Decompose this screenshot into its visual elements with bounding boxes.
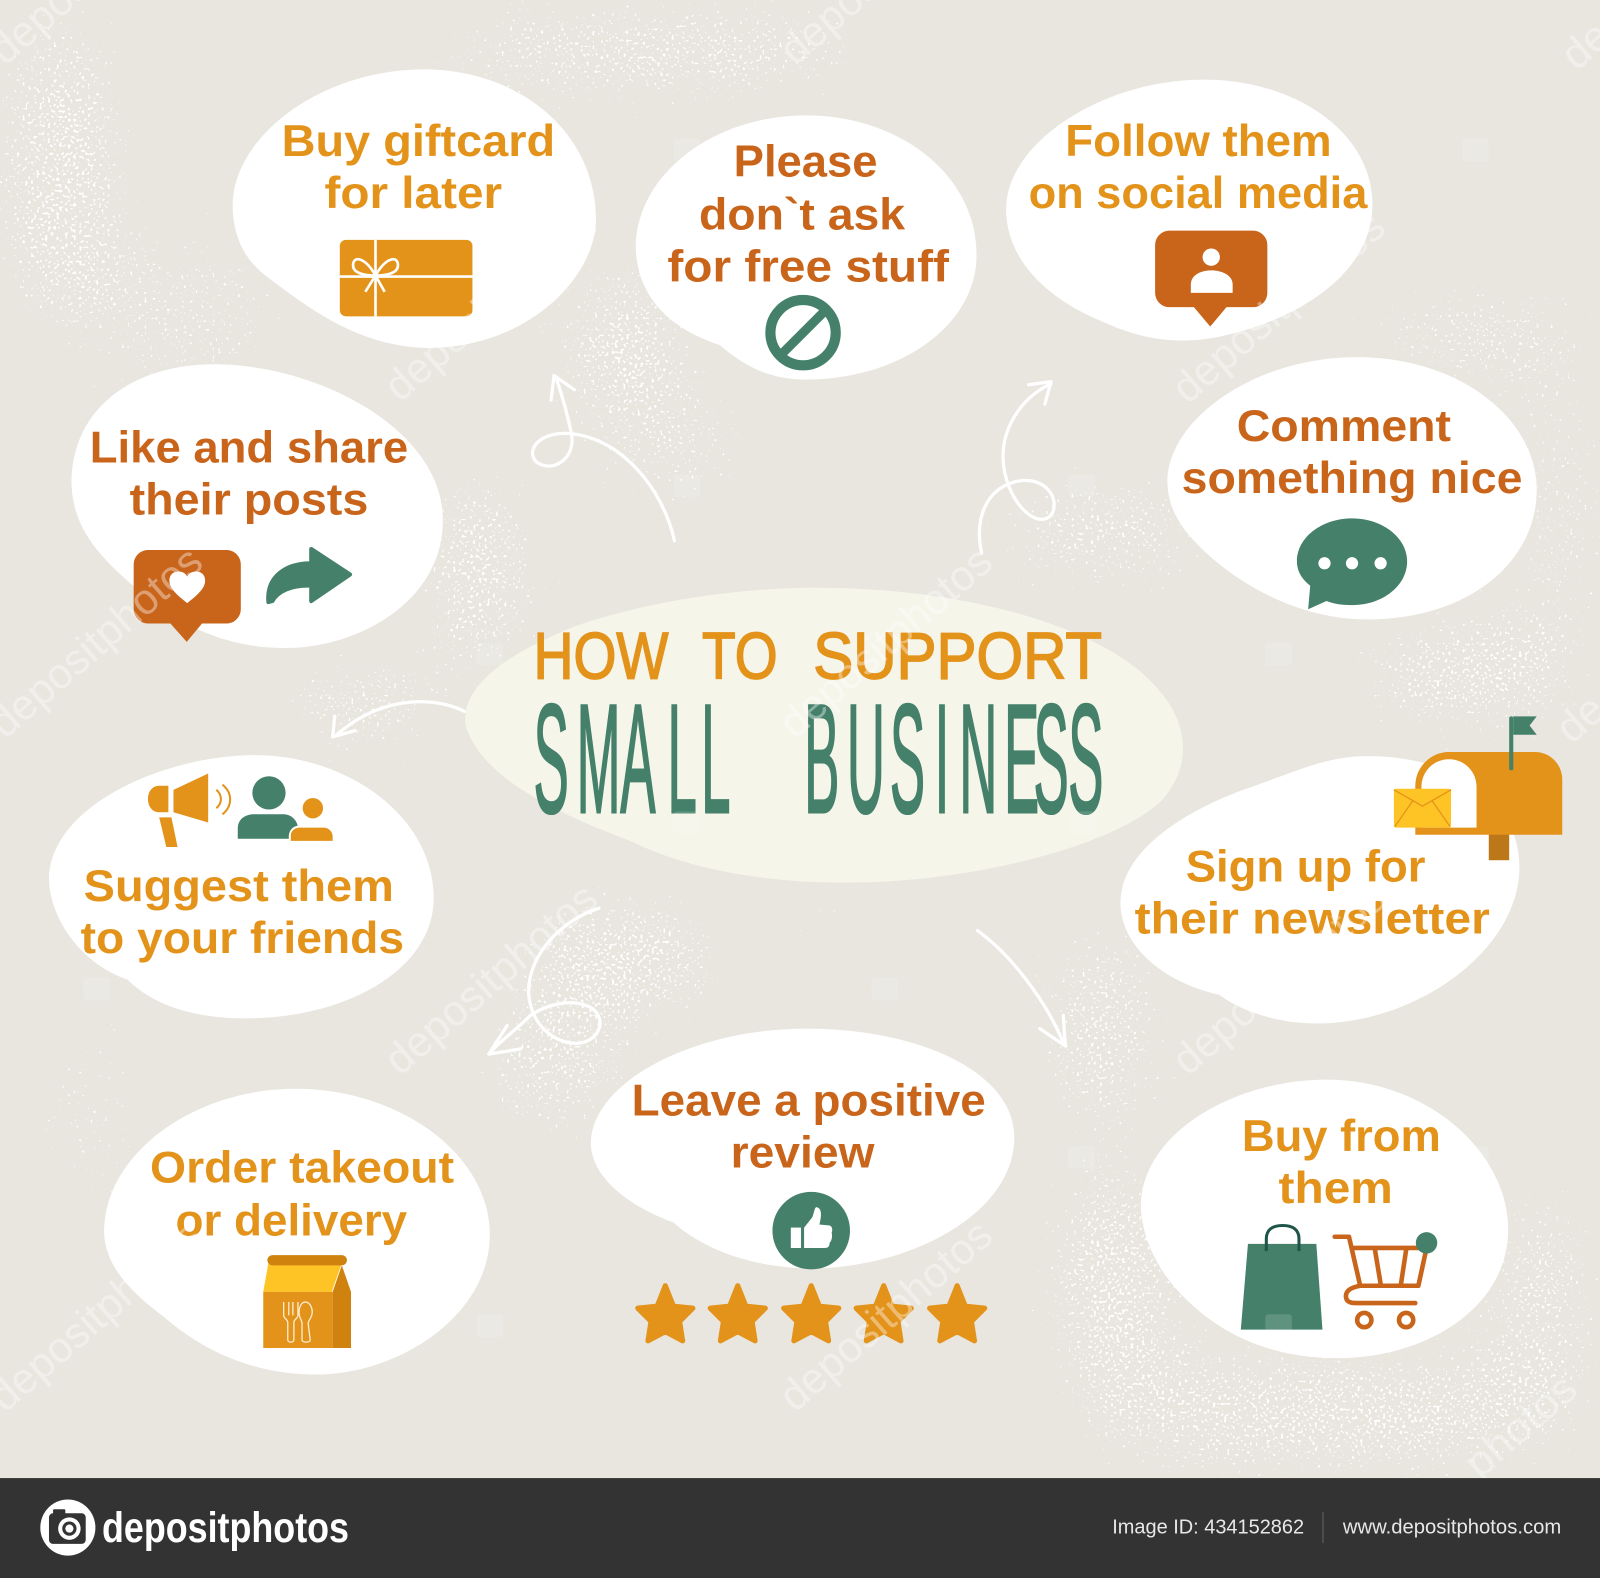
text: their posts	[130, 473, 368, 524]
title line: small business: SMALL BUSINESS	[534, 672, 1103, 846]
panel: suggest to friends	[49, 755, 434, 1018]
blob	[1120, 756, 1519, 1023]
icon: share arrow	[268, 549, 350, 602]
title line: how to support: TO	[702, 620, 778, 694]
icon: megaphone	[148, 773, 230, 847]
text: Follow them	[1065, 115, 1332, 166]
title blob	[465, 588, 1183, 883]
text: for free stuff	[667, 241, 950, 292]
text: or delivery	[176, 1195, 407, 1246]
text: Order takeout	[150, 1142, 454, 1193]
text: Comment	[1237, 400, 1451, 451]
title line: how to support	[534, 620, 1102, 694]
text: review	[731, 1126, 875, 1177]
title line: how to support: SUPPORT	[813, 620, 1102, 694]
text: Sign up for	[1186, 841, 1426, 892]
watermark overlay: depositphotos	[1163, 874, 1395, 1084]
watermark overlay: depositphotos	[770, 1211, 1002, 1421]
text: Please	[734, 136, 878, 187]
icon: shopping bag	[1241, 1226, 1322, 1330]
panel: like and share	[71, 364, 443, 648]
curved arrow: to social media	[979, 382, 1054, 553]
text	[81, 860, 404, 963]
text: on social media	[1029, 167, 1368, 218]
panel: leave a review	[591, 1029, 1014, 1341]
blob	[1167, 357, 1537, 619]
blob	[591, 1029, 1014, 1268]
icon: chat bubble	[1297, 518, 1407, 609]
text: Buy giftcard	[282, 115, 555, 166]
text: Like and share	[90, 421, 408, 472]
panel: newsletter	[1120, 716, 1562, 1023]
text: don`t ask	[699, 189, 905, 240]
panel: please don't ask	[636, 115, 977, 380]
watermark overlay: photos	[1455, 1364, 1586, 1487]
text: Leave a positive	[632, 1074, 986, 1125]
watermark overlay: depositphotos	[770, 537, 1002, 747]
logo wordmark: depositphotos	[102, 1504, 349, 1552]
text	[150, 1142, 454, 1246]
text	[1242, 1110, 1441, 1213]
icon: thumbs up	[772, 1192, 850, 1269]
text	[1029, 115, 1368, 218]
text: for later	[324, 167, 502, 218]
blob	[104, 1089, 490, 1375]
panel: comment something nice	[1167, 357, 1537, 619]
icon: five stars	[638, 1286, 985, 1341]
website url: www.depositphotos.com	[1342, 1517, 1561, 1539]
text	[90, 421, 408, 524]
text	[667, 136, 950, 292]
icon: prohibited sign	[770, 300, 836, 365]
text: them	[1279, 1162, 1393, 1213]
text: Buy from	[1242, 1110, 1441, 1161]
blob	[1006, 80, 1372, 341]
watermark overlay: depositphotos	[375, 874, 607, 1084]
panel: order takeout	[104, 1089, 490, 1375]
icon: food bag	[263, 1255, 351, 1348]
image id: Image ID: 434152862	[1112, 1517, 1304, 1539]
panel: central title	[465, 588, 1183, 883]
curved arrow: to takeout	[489, 908, 600, 1054]
text	[1135, 841, 1490, 944]
panel: buy from them	[1141, 1080, 1508, 1358]
icon: camera logo	[40, 1500, 95, 1556]
watermark overlay: depositphotos	[375, 200, 607, 411]
panel: buy giftcard	[233, 69, 596, 348]
footer bar	[0, 1478, 1600, 1578]
curved arrow: to buy from them	[978, 931, 1065, 1046]
curved arrow: to giftcard	[533, 376, 674, 541]
icon: gift card	[340, 240, 472, 316]
text	[632, 1074, 986, 1177]
blob	[233, 69, 596, 348]
text: Suggest them	[84, 860, 394, 911]
icon: like bubble	[134, 550, 241, 642]
icon: mailbox with envelope	[1394, 716, 1562, 860]
icon: two people	[238, 776, 335, 843]
watermark overlay: depositphotos	[1163, 202, 1395, 413]
text: to your friends	[81, 912, 404, 963]
blob	[636, 115, 977, 380]
text: something nice	[1182, 452, 1522, 503]
curved arrow: to suggest friends	[333, 702, 464, 737]
text: their newsletter	[1135, 893, 1490, 944]
blob	[49, 755, 434, 1018]
icon: shopping cart	[1335, 1232, 1437, 1327]
text	[1182, 400, 1522, 503]
blob	[71, 364, 443, 648]
panel: follow them	[1006, 80, 1372, 341]
icon: profile speech bubble	[1155, 231, 1267, 327]
title line: how to support: HOW	[534, 620, 669, 694]
text	[282, 115, 555, 218]
blob	[1141, 1080, 1508, 1358]
